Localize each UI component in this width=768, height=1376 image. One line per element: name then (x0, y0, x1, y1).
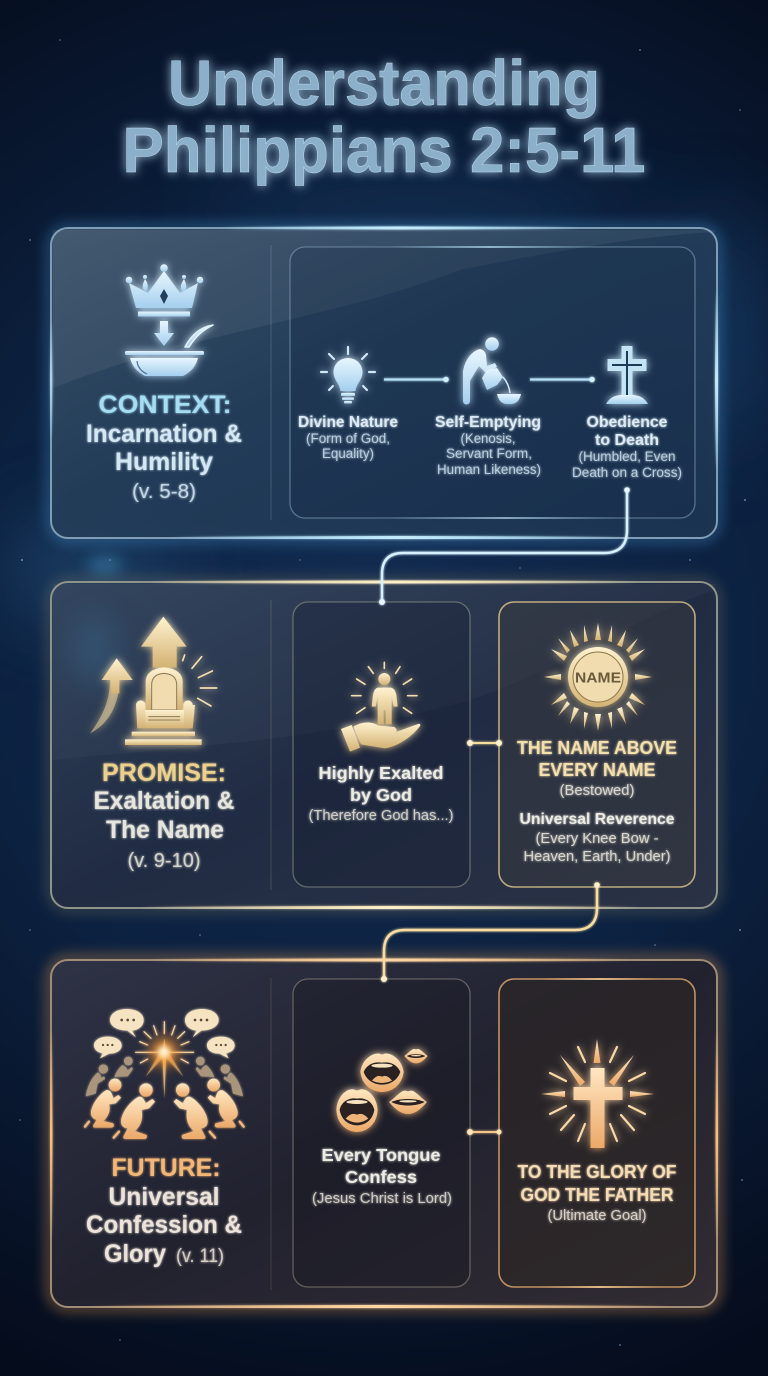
label: every tongue confess: Confess (345, 1167, 417, 1187)
heading: context: (v. 5-8) (132, 481, 196, 503)
step: obedience to death: Death on a Cross) (572, 465, 682, 480)
label: every tongue confess (312, 1145, 452, 1207)
heading: promise: (v. 9-10) (128, 850, 200, 872)
icon: name sun (544, 623, 652, 731)
label: highly exalted: (Therefore God has...) (308, 808, 454, 824)
icon: radiant cross (541, 1039, 654, 1148)
label: the name above every name: Heaven, Earth, Under) (524, 849, 670, 865)
step: self-emptying (435, 414, 541, 477)
heading: context: Humility (115, 448, 213, 476)
icon: cross on mound (606, 346, 648, 404)
icon: light bulb (321, 347, 375, 404)
heading: context (86, 391, 242, 503)
title: Understanding (168, 47, 600, 119)
step: self-emptying: Self-Emptying (435, 414, 541, 431)
step: divine nature: (Form of God, (306, 431, 390, 446)
step: self-emptying: Human Likeness) (437, 462, 541, 477)
step: obedience to death: Obedience (586, 414, 668, 431)
heading: context: Incarnation & (86, 420, 242, 448)
label: every tongue confess: Every Tongue (322, 1145, 441, 1165)
heading: promise: PROMISE: (102, 759, 226, 787)
icon: confessing mouths (336, 1049, 428, 1132)
label: highly exalted: Highly Exalted (318, 763, 444, 783)
step: obedience to death: to Death (595, 432, 659, 449)
heading: context: CONTEXT: (98, 391, 232, 419)
step: divine nature (298, 414, 398, 461)
step: obedience to death (572, 414, 682, 480)
panel: context (50, 226, 718, 539)
icon: throne and arrows (90, 617, 217, 745)
heading: promise: The Name (106, 816, 224, 844)
heading: future: (v. 11) (176, 1246, 224, 1267)
label: to the glory of god the father: TO THE GLORY OF (518, 1162, 676, 1182)
icon: servant pouring (463, 337, 521, 405)
label: to the glory of god the father: GOD THE FATHER (520, 1185, 674, 1205)
connector: emptying to obedience (530, 377, 595, 382)
label: highly exalted (308, 763, 454, 824)
label: highly exalted: by God (350, 785, 412, 805)
title: Philippians 2:5-11 (122, 114, 646, 186)
label: to the glory of god the father (518, 1162, 676, 1224)
heading: future: Glory (104, 1240, 166, 1268)
step: divine nature: Equality) (322, 446, 374, 461)
connector: tongue to glory (467, 1129, 502, 1135)
label: to the glory of god the father: (Ultimate Goal) (548, 1208, 646, 1224)
step: self-emptying: Servant Form, (446, 446, 532, 461)
panel: future (50, 958, 718, 1308)
heading: future: FUTURE: (112, 1154, 220, 1182)
heading: promise: Exaltation & (94, 787, 234, 815)
icon: name sun: NAME (575, 670, 621, 686)
connector: context to promise (379, 487, 630, 605)
heading: future: Universal (108, 1183, 220, 1211)
label: the name above every name: THE NAME ABOVE (517, 738, 677, 758)
step: divine nature: Divine Nature (298, 414, 398, 431)
heading: future (86, 1154, 242, 1268)
label: the name above every name (517, 738, 677, 865)
step: self-emptying: (Kenosis, (460, 431, 516, 446)
label: every tongue confess: (Jesus Christ is Lord) (312, 1191, 452, 1207)
connector: nature to emptying (384, 377, 449, 382)
connector: exalted to name (467, 740, 502, 746)
step: obedience to death: (Humbled, Even (578, 449, 676, 464)
heading: promise (94, 759, 234, 872)
icon: person on hand (341, 662, 420, 752)
panel: promise (51, 580, 717, 909)
label: the name above every name: EVERY NAME (538, 760, 656, 780)
connector: promise to future (381, 882, 600, 982)
label: the name above every name: (Every Knee Bow - (536, 831, 659, 847)
icon: crown over bowl (125, 264, 213, 376)
icon: worshippers and light (85, 1009, 244, 1139)
label: the name above every name: (Bestowed) (560, 783, 634, 799)
heading: future: Confession & (86, 1211, 242, 1239)
title (122, 47, 646, 186)
label: the name above every name: Universal Reverence (520, 811, 675, 828)
